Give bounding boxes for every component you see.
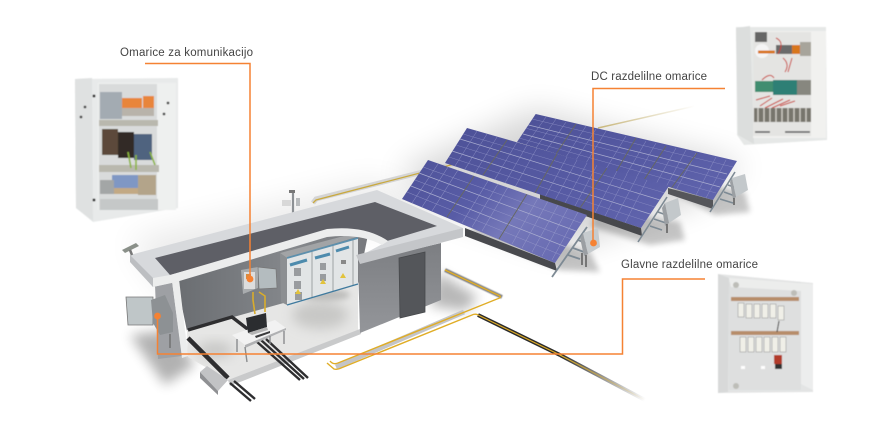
left pillar xyxy=(155,279,188,359)
cables with conduit to panels xyxy=(327,270,645,400)
back wall xyxy=(176,225,370,331)
cable: upper conduit xyxy=(313,106,695,203)
label: DC distribution: DC razdelilne omarice xyxy=(591,71,707,83)
floor xyxy=(187,283,361,386)
building xyxy=(122,190,463,401)
solar array: back row xyxy=(517,114,748,212)
door xyxy=(399,252,425,318)
leader: DC distribution xyxy=(590,88,725,246)
roof top rim xyxy=(130,190,463,287)
desk and laptop xyxy=(232,313,286,362)
solar array: middle row xyxy=(445,128,681,242)
label: communication cabinets: Omarice za komunikacijo xyxy=(120,47,253,59)
label: main distribution: Glavne razdelilne omarice xyxy=(621,259,758,271)
weather mast xyxy=(282,190,300,227)
ground shadows xyxy=(130,110,750,385)
solar array: front row xyxy=(402,160,600,277)
leader: communication cabinets xyxy=(145,64,253,282)
main switchgear xyxy=(280,233,360,306)
outdoor cabinet xyxy=(126,295,173,348)
roof surface xyxy=(155,202,437,275)
roof front fascia xyxy=(130,255,153,287)
cabinet: DC distribution xyxy=(736,26,827,145)
arched roof edge xyxy=(153,228,388,287)
communication cabinet xyxy=(241,267,277,314)
floor cables xyxy=(188,317,308,401)
leader: main distribution xyxy=(154,279,705,354)
right block xyxy=(356,228,463,333)
cabinet: main distribution xyxy=(718,274,813,393)
floor box xyxy=(200,366,228,395)
cabinet: communication xyxy=(75,78,178,222)
surveillance camera xyxy=(122,243,139,255)
